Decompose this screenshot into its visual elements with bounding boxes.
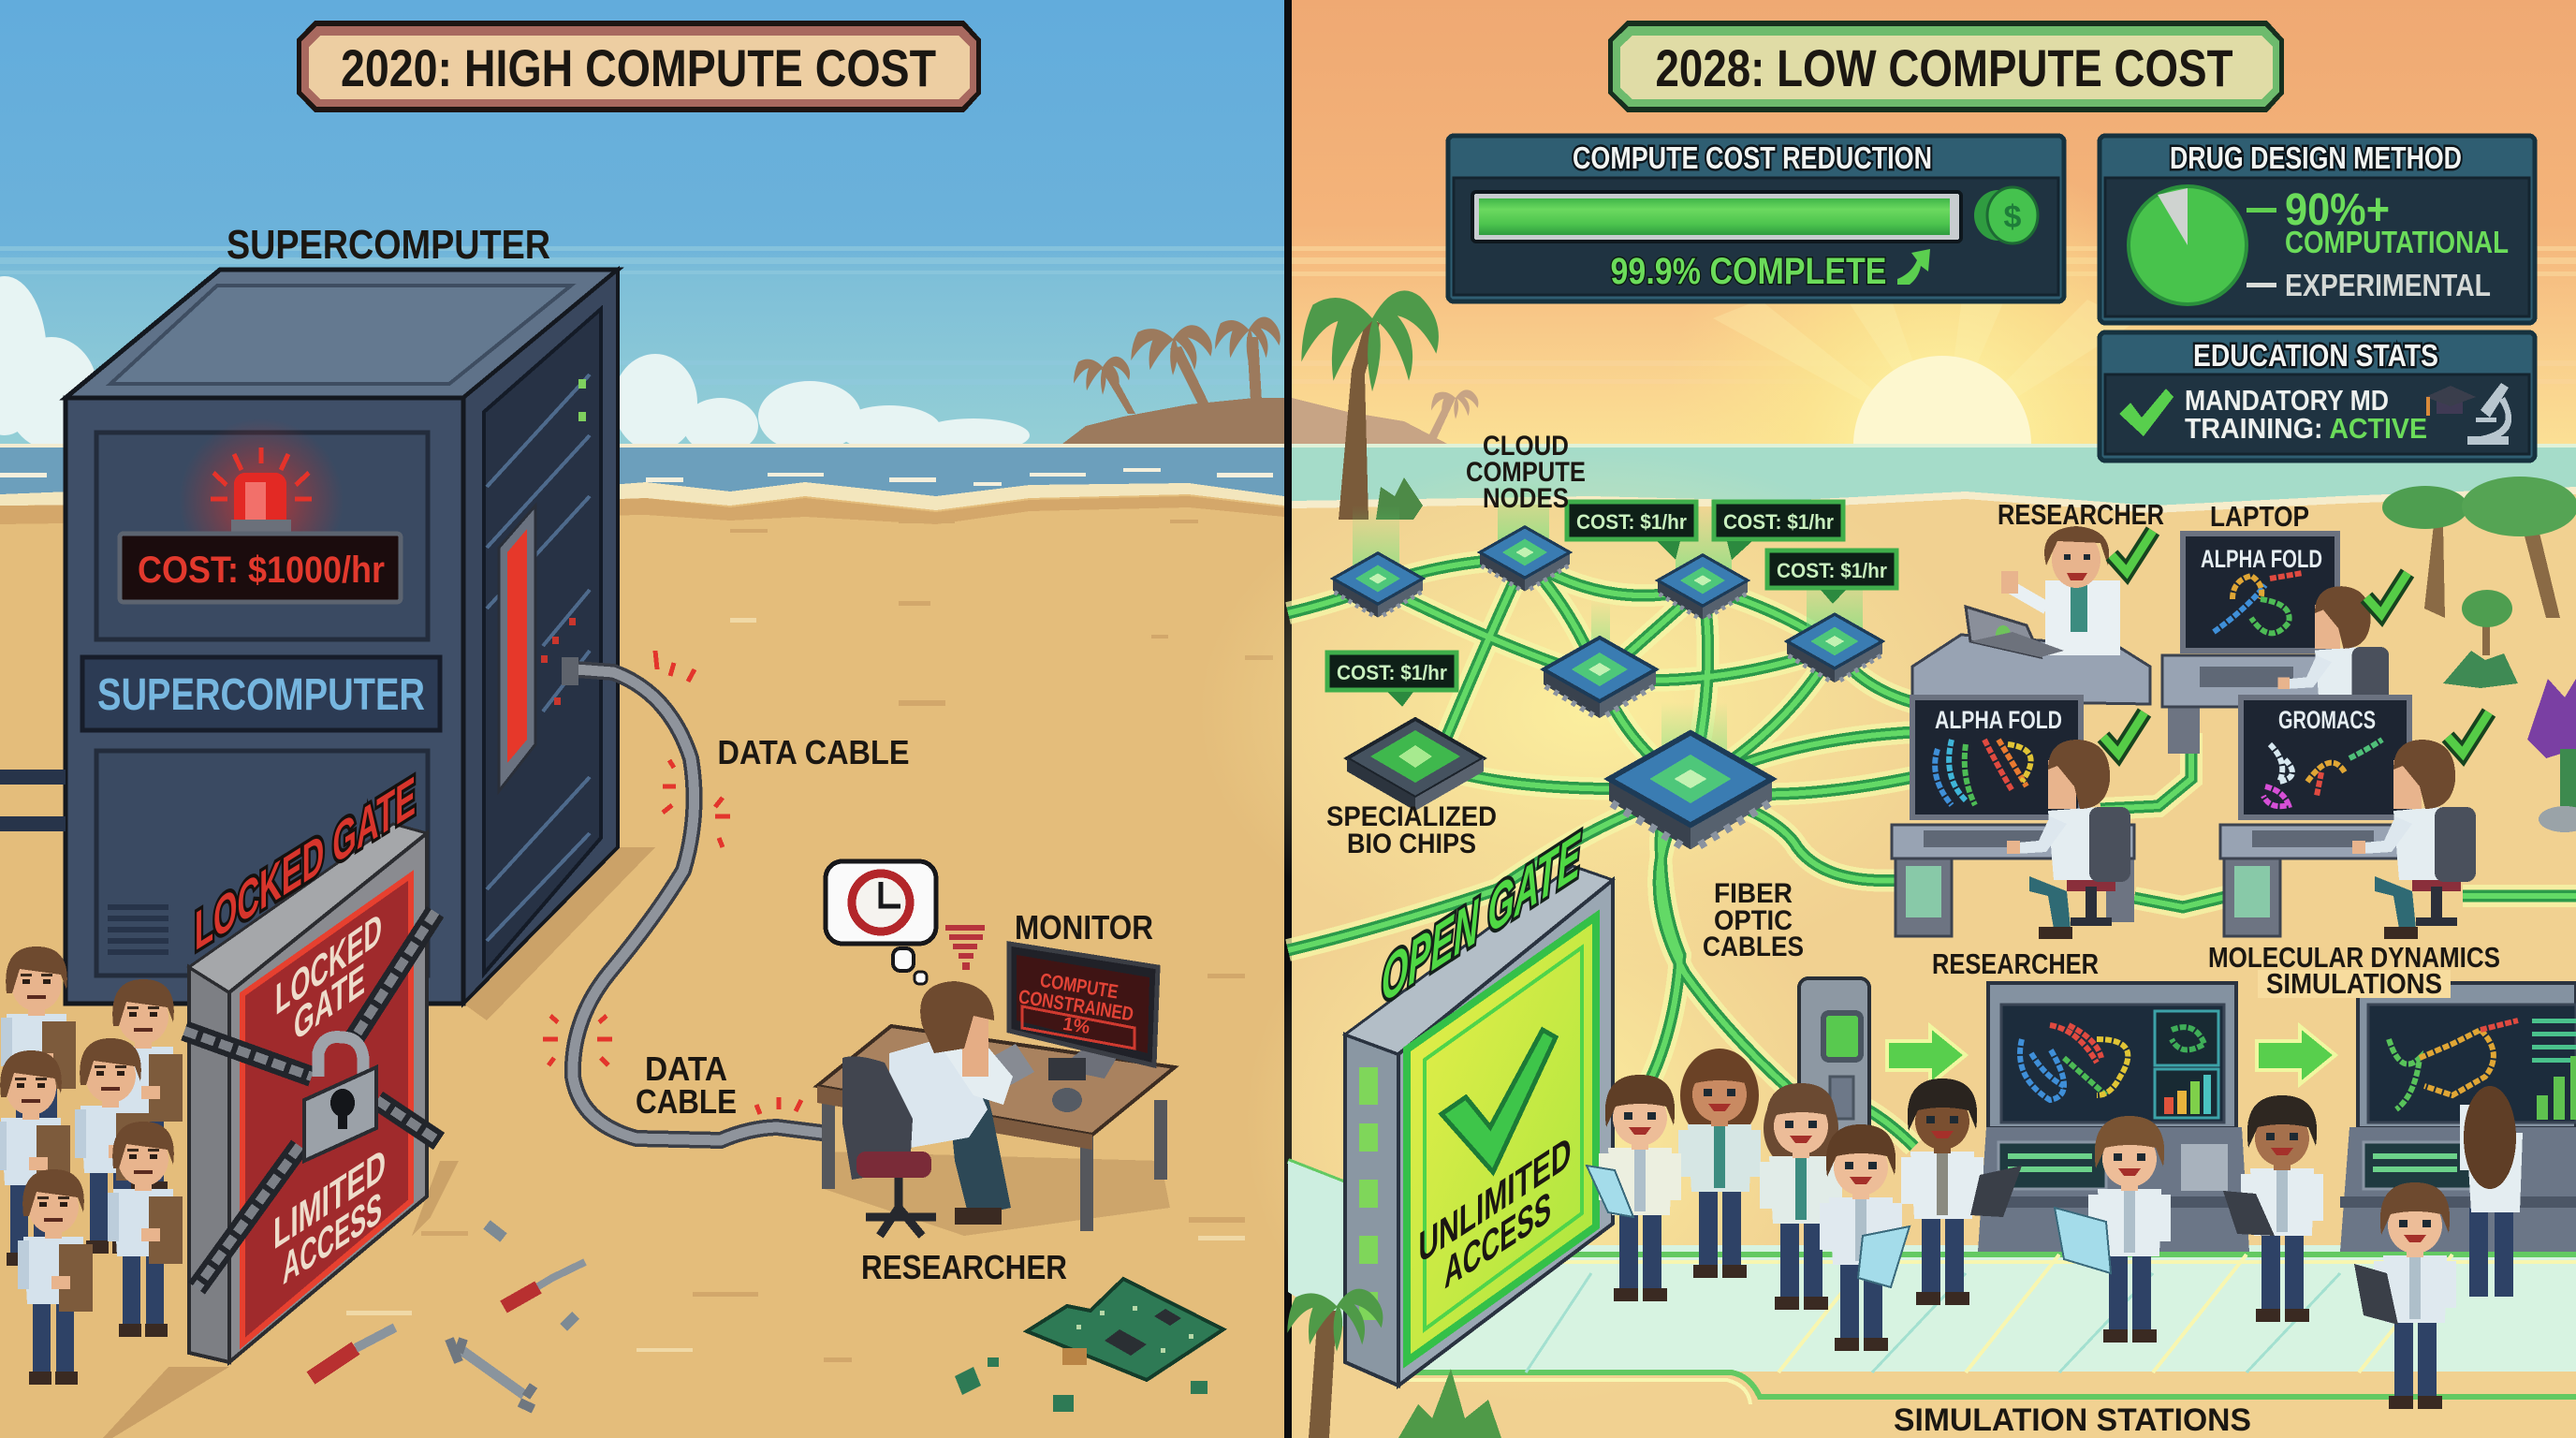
label: cloud compute nodes: CLOUD <box>1483 431 1569 462</box>
label: supercomputer: SUPERCOMPUTER <box>227 222 550 268</box>
gate text bottom <box>273 1137 386 1294</box>
label: specialized bio chips <box>1326 801 1497 859</box>
panel: compute cost reduction: COMPUTE COST REDUCTION <box>1573 140 1932 175</box>
workstation: top alpha fold <box>2162 534 2389 766</box>
label: researcher: RESEARCHER <box>861 1248 1067 1286</box>
sun glow <box>1661 150 2223 712</box>
label: fiber optic cables: OPTIC <box>1714 905 1793 936</box>
laptop <box>1966 607 2064 657</box>
simulation station 1 <box>1978 983 2249 1252</box>
palm tree <box>1301 290 1439 520</box>
gate text top: GATE <box>294 953 365 1050</box>
shadows on sand <box>103 1367 229 1438</box>
label: data cable upper: DATA CABLE <box>717 733 910 771</box>
chains <box>184 912 439 1288</box>
cable strain sparks <box>543 651 801 1114</box>
sky <box>0 0 1284 446</box>
lower panel <box>96 751 428 976</box>
locked gate <box>184 765 439 1362</box>
distant island with palms <box>1062 316 1284 444</box>
researcher with laptop <box>2001 526 2120 655</box>
center divider <box>1284 0 1292 1438</box>
simulation station 2 <box>2340 983 2576 1252</box>
workstation: top alpha fold: ALPHA FOLD <box>2201 545 2322 573</box>
label: specialized bio chips: SPECIALIZED <box>1326 801 1497 832</box>
check: alpha fold <box>2103 712 2144 754</box>
arrow 2 <box>2257 1026 2335 1084</box>
label: cloud compute nodes: NODES <box>1483 483 1569 514</box>
label: simulation stations: SIMULATION STATIONS <box>1894 1402 2251 1438</box>
locked gate heading: LOCKED GATE <box>195 765 416 963</box>
cost tag 3: COST: $1/hr <box>1777 559 1887 582</box>
check: laptop researcher <box>2112 531 2153 572</box>
pie chart <box>2129 186 2247 304</box>
beacon glow <box>179 418 344 583</box>
specialized bio chip <box>1347 719 1484 811</box>
workstation: gromacs <box>2220 697 2476 939</box>
data pillar <box>1799 978 1869 1147</box>
cost display: COST: $1000/hr <box>138 550 385 591</box>
panel: compute cost reduction <box>1448 136 2064 301</box>
label: molecular dynamics simulations <box>2208 941 2500 1000</box>
progress text: 99.9% COMPLETE <box>1610 251 1887 292</box>
cloud compute nodes <box>1333 527 1882 718</box>
label: data cable lower: DATA <box>645 1049 727 1088</box>
label: researcher top: RESEARCHER <box>1998 498 2164 531</box>
bush <box>1376 477 1423 520</box>
microscope icon <box>2467 383 2511 445</box>
queue of waiting researchers <box>0 946 183 1385</box>
label: researcher middle: RESEARCHER <box>1932 947 2099 980</box>
monitor: 1% <box>1061 1014 1091 1038</box>
sea <box>0 446 1284 502</box>
foreground palm <box>1287 1289 1383 1438</box>
trees right <box>2382 477 2576 688</box>
sky <box>1292 0 2576 446</box>
protein <box>1935 740 2031 805</box>
back cables <box>0 770 66 831</box>
floor platform <box>1288 1161 2576 1404</box>
cost tag 1: COST: $1/hr <box>1576 510 1687 534</box>
panel: drug design method: DRUG DESIGN METHOD <box>2170 140 2462 175</box>
cost tag 1 <box>1567 502 1696 560</box>
label: data cable lower: CABLE <box>636 1082 737 1121</box>
monitor: CONSTRAINED <box>1017 986 1135 1025</box>
supercomputer tower <box>66 270 618 1004</box>
title banner: 2028: 2028: LOW COMPUTE COST <box>1655 38 2233 97</box>
monitor: COMPUTE <box>1039 970 1120 1004</box>
cost tag 2 <box>1714 502 1843 560</box>
coin icon: $ <box>2004 199 2022 235</box>
label: fiber optic cables: CABLES <box>1703 932 1804 962</box>
molecule <box>2263 740 2382 806</box>
90 percent: 90%+ <box>2285 185 2390 235</box>
label: molecular dynamics simulations: SIMULATIONS <box>2266 967 2442 1000</box>
check mark <box>2119 389 2174 436</box>
workstation: alpha fold: ALPHA FOLD <box>1935 706 2062 734</box>
beacon rays <box>211 448 312 499</box>
open gate <box>1345 818 1613 1386</box>
padlock <box>304 1037 376 1161</box>
open gate heading: OPEN GATE <box>1382 818 1581 1017</box>
check: top alpha fold <box>2366 573 2408 614</box>
sand <box>0 487 1284 1438</box>
experimental: EXPERIMENTAL <box>2285 268 2491 302</box>
clouds <box>0 276 1030 459</box>
scattered tools <box>311 1225 585 1409</box>
central hub chip <box>1609 733 1772 849</box>
cost tag 4: COST: $1/hr <box>1337 661 1447 684</box>
panel: 2028 low compute cost beach scene <box>1198 0 2576 1438</box>
compute beams <box>1353 477 1863 786</box>
sea <box>1292 446 2576 506</box>
alpha fold molecule <box>2214 573 2303 633</box>
laptop researcher desk <box>1912 526 2150 704</box>
label: fiber optic cables <box>1703 878 1804 962</box>
foreground plant <box>1398 1369 1501 1438</box>
researcher at screen seen from back <box>2460 1086 2523 1297</box>
grad cap icon <box>2425 386 2476 416</box>
gate text top <box>275 902 382 1050</box>
network glow <box>1198 449 1984 974</box>
title banner: 2028 <box>1608 21 2284 112</box>
dark tablets <box>1970 1166 2398 1325</box>
monitor <box>1009 944 1158 1080</box>
vent <box>108 904 168 955</box>
title banner: 2020: 2020: HIGH COMPUTE COST <box>341 38 936 97</box>
sun rays <box>1713 271 2134 445</box>
label: monitor: MONITOR <box>1015 908 1153 946</box>
sun <box>1853 356 2031 534</box>
panel: 2020 high compute cost beach scene <box>0 0 1284 1438</box>
label: specialized bio chips: BIO CHIPS <box>1347 829 1476 859</box>
researcher with long hair <box>1678 1049 1761 1278</box>
beacon <box>231 473 291 535</box>
thought bubble with clock <box>826 861 936 984</box>
label: molecular dynamics simulations: MOLECULAR DYNAMICS <box>2208 941 2500 974</box>
label: data cable lower <box>636 1049 737 1121</box>
researcher desk <box>817 1026 1175 1231</box>
workstation: alpha fold <box>1892 697 2134 939</box>
panel: drug design method <box>2100 136 2535 323</box>
red status bar <box>499 506 535 791</box>
label: laptop: LAPTOP <box>2210 500 2309 533</box>
label: cloud compute nodes: COMPUTE <box>1466 457 1586 488</box>
progress bar <box>1472 192 1961 242</box>
supercomputer plate <box>82 657 440 730</box>
panel: education stats: EDUCATION STATS <box>2193 338 2438 373</box>
cost tag 4 <box>1327 653 1456 707</box>
purple plant <box>2527 679 2576 832</box>
panel: education stats <box>2100 332 2535 461</box>
fiber optic cable network <box>1288 559 2576 1147</box>
unlimited access text: UNLIMITED <box>1419 1125 1571 1273</box>
coin icon <box>1974 187 2038 243</box>
cost tag 2: COST: $1/hr <box>1723 510 1834 534</box>
large check mark <box>1442 1030 1556 1172</box>
tablets <box>1587 1166 2111 1287</box>
arrow 1 <box>1887 1026 1966 1084</box>
cost tag 3 <box>1767 550 1896 604</box>
sand <box>1292 487 2576 1438</box>
gate text bottom: LIMITED <box>273 1137 386 1259</box>
up arrow <box>1897 249 1930 285</box>
data cable <box>562 657 829 1140</box>
broken circuit board <box>955 1279 1223 1412</box>
gate text top: LOCKED <box>275 902 382 1025</box>
supercomputer plate: SUPERCOMPUTER <box>97 670 425 720</box>
gate text bottom: ACCESS <box>283 1181 382 1294</box>
distant island <box>1292 389 1478 446</box>
upper panel <box>96 433 428 639</box>
cost display <box>120 534 401 602</box>
computational: COMPUTATIONAL <box>2285 225 2509 259</box>
unlimited access text <box>1419 1125 1571 1299</box>
workstation: gromacs: GROMACS <box>2278 706 2376 734</box>
label: fiber optic cables: FIBER <box>1714 878 1793 909</box>
label: cloud compute nodes <box>1466 431 1586 514</box>
stress swirl <box>945 925 985 970</box>
check: gromacs <box>2448 712 2489 754</box>
researcher with shoulder hair <box>1760 1083 1842 1310</box>
cost tags <box>1327 502 1896 707</box>
mandatory md text: MANDATORY MD <box>2185 384 2389 417</box>
title banner: 2020 <box>297 21 981 112</box>
training active text: TRAINING: ACTIVE <box>2185 412 2427 445</box>
frustrated researcher at desk <box>842 981 1013 1236</box>
unlimited access text: ACCESS <box>1444 1181 1551 1299</box>
team of researchers <box>1587 1049 2523 1409</box>
